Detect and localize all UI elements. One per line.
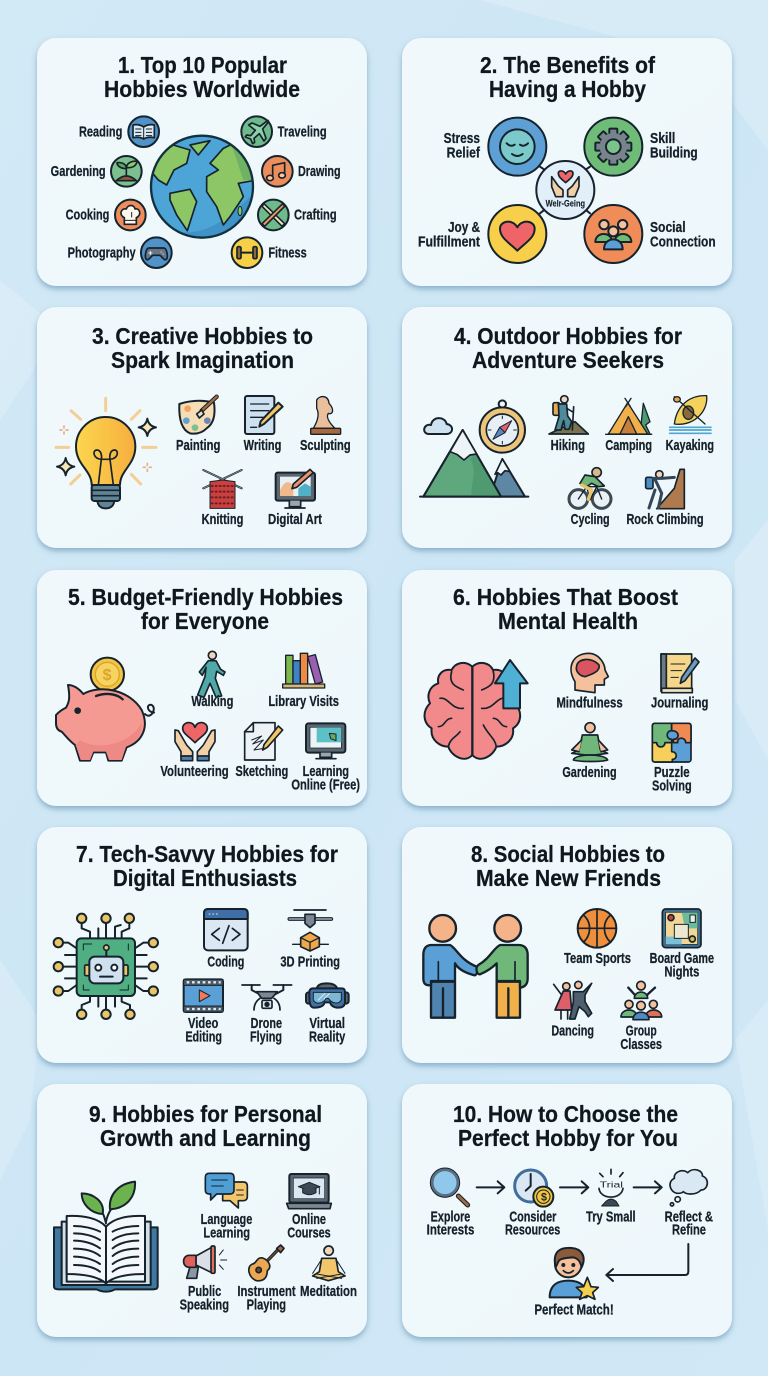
label: rock climbing: Rock Climbing (626, 512, 704, 528)
arrow: reflect to perfect match (606, 1244, 688, 1281)
icon: walking (198, 651, 225, 697)
heading: card 5 (68, 584, 343, 634)
icon: board game (662, 909, 701, 948)
text: explore interests (427, 1209, 474, 1238)
text: puzzle solving (652, 765, 692, 795)
label: coding: Coding (207, 955, 244, 971)
icon: writing (245, 396, 283, 434)
icon: magnifier (430, 1168, 468, 1205)
icon: knitting (203, 470, 242, 508)
label: gardening: Gardening (51, 164, 106, 180)
heading: card 3: Spark Imagination (111, 347, 294, 373)
label: try small: Try Small (586, 1209, 636, 1225)
label: library visits: Library Visits (268, 694, 339, 710)
arrow: try to reflect (634, 1181, 662, 1193)
heading: card 9 (89, 1101, 322, 1151)
text: learning online (291, 764, 360, 794)
label: camping: Camping (605, 438, 652, 454)
heading: card 1 (104, 52, 300, 102)
panel: 10 choose the perfect hobby (402, 1084, 732, 1337)
text: board game nights: Board Game (650, 951, 714, 967)
heading: card 5: 5. Budget-Friendly Hobbies (68, 584, 343, 610)
icon: language learning (205, 1173, 247, 1208)
text: consider resources (505, 1209, 560, 1238)
heading: card 6: 6. Hobbies That Boost (453, 584, 678, 610)
icon: two people shaking hands (423, 915, 528, 1018)
heading: card 2: Having a Hobby (489, 76, 646, 102)
arrow: consider to try (560, 1181, 588, 1193)
icon: journaling (661, 654, 699, 693)
icon: kayaking (670, 396, 711, 433)
text: puzzle solving: Solving (652, 779, 692, 795)
label: photography: Photography (68, 245, 136, 261)
icon: public speaking megaphone (184, 1246, 227, 1278)
label: knitting: Knitting (202, 512, 243, 528)
text: video editing: Editing (185, 1030, 222, 1046)
icon: sculpting bust (311, 397, 341, 434)
icon: photography controller (141, 237, 172, 268)
icon: guitar (249, 1245, 284, 1281)
label: sculpting: Sculpting (300, 438, 351, 454)
panel: 6 mental health hobbies (402, 570, 732, 806)
heading: card 4: 4. Outdoor Hobbies for (454, 323, 682, 349)
icon: perfect match person with star (550, 1248, 598, 1299)
text: virtual reality: Reality (309, 1030, 345, 1046)
heading: card 3: 3. Creative Hobbies to (92, 323, 313, 349)
label: dancing: Dancing (551, 1023, 594, 1039)
icon: cycling (569, 468, 611, 508)
icon: piggy bank (56, 658, 154, 761)
label: kayaking: Kayaking (666, 438, 714, 454)
text: board game nights (650, 951, 714, 981)
text: public speaking: Public (188, 1284, 221, 1300)
text: virtual reality (309, 1016, 345, 1046)
text: language learning: Learning (203, 1226, 250, 1242)
icon: brain with up arrow (425, 660, 528, 759)
heading: card 9: Growth and Learning (100, 1125, 311, 1151)
icon: 3d printing (289, 910, 331, 951)
label: crafting: Crafting (294, 208, 337, 224)
text: reflect and refine: Refine (672, 1222, 706, 1238)
icon: drawing music notes (262, 156, 293, 187)
text: stress relief (444, 131, 480, 161)
icon: clock and coin (515, 1170, 553, 1207)
icon: clock and coin: $ (541, 1192, 547, 1204)
heading: card 6: Mental Health (498, 608, 638, 634)
text: joy and fulfillment: Joy & (448, 220, 480, 236)
icon: gardening (111, 156, 142, 187)
icon: learning online (306, 723, 345, 759)
label: volunteering: Volunteering (160, 764, 229, 780)
heading: card 8: Make New Friends (476, 865, 661, 891)
icon: traveling plane (241, 116, 272, 147)
icon: gardening meditation figure (572, 723, 608, 761)
text: online courses: Online (292, 1212, 326, 1228)
text: drone flying: Flying (250, 1030, 282, 1046)
heading: card 1: 1. Top 10 Popular (118, 52, 287, 78)
text: learning online: Learning (303, 764, 349, 780)
text: online courses: Courses (287, 1226, 331, 1242)
icon: joy heart (488, 205, 546, 263)
icon: drone (242, 985, 292, 1010)
heading: card 7: 7. Tech-Savvy Hobbies for (76, 841, 338, 867)
text: group classes: Classes (620, 1037, 662, 1053)
text: stress relief: Stress (444, 131, 480, 147)
icon: basketball (578, 909, 616, 948)
label: gardening: Gardening (562, 765, 617, 781)
icon: camping tent (606, 398, 652, 434)
icon: sketching (245, 723, 283, 760)
icon: trial cup: Trial (600, 1179, 623, 1189)
label: sketching: Sketching (235, 764, 288, 780)
text: explore interests: Interests (427, 1222, 474, 1238)
heading: card 8: 8. Social Hobbies to (471, 841, 665, 867)
text: public speaking: Speaking (180, 1298, 229, 1314)
text: joy and fulfillment: Fulfillment (418, 234, 480, 250)
panel: 4 outdoor hobbies (402, 307, 732, 548)
label: digital art: Digital Art (268, 512, 322, 528)
icon: compass (480, 400, 525, 453)
heading: card 10: Perfect Hobby for You (458, 1125, 678, 1151)
label: cycling: Cycling (571, 512, 610, 528)
text: public speaking (180, 1284, 229, 1314)
label: walking: Walking (191, 694, 233, 710)
panel: 8 social hobbies (402, 827, 732, 1063)
text: instrument playing: Instrument (237, 1284, 296, 1300)
text: skill building (650, 131, 698, 161)
icon: online courses (287, 1174, 331, 1209)
icon: mindfulness head (571, 653, 608, 693)
text: stress relief: Relief (447, 145, 480, 161)
label: perfect match: Perfect Match! (534, 1303, 614, 1319)
text: consider resources: Resources (505, 1222, 560, 1238)
heading: card 6 (453, 584, 678, 634)
icon: cloud (424, 418, 452, 434)
text: puzzle solving: Puzzle (654, 765, 690, 781)
icon: digital art (276, 469, 315, 508)
heading: card 7 (76, 841, 338, 891)
panel: 5 budget-friendly hobbies (37, 570, 367, 806)
text: virtual reality: Virtual (309, 1016, 345, 1032)
heading: card 3 (92, 323, 313, 373)
icon: coding (204, 909, 248, 950)
icon: stress relief face (488, 118, 546, 176)
heading: card 9: 9. Hobbies for Personal (89, 1101, 322, 1127)
icon: fitness dumbbell (232, 237, 262, 268)
text: explore interests: Explore (431, 1209, 470, 1225)
label: fitness: Fitness (268, 245, 307, 261)
heading: card 1: Hobbies Worldwide (104, 76, 300, 102)
label: hiking: Hiking (551, 438, 585, 454)
text: social connection: Social (650, 220, 686, 236)
icon: meditation (313, 1246, 345, 1281)
icon: hiking (549, 396, 588, 434)
text: drone flying: Drone (251, 1016, 282, 1032)
text: drone flying (250, 1016, 282, 1046)
text: skill building: Building (650, 145, 698, 161)
text: group classes: Group (626, 1023, 657, 1039)
heading: card 10: 10. How to Choose the (453, 1101, 678, 1127)
label: journaling: Journaling (651, 696, 708, 712)
text: language learning (201, 1212, 252, 1242)
icon: skill gear (584, 118, 642, 176)
icon: cooking (115, 200, 146, 230)
heading: card 7: Digital Enthusiasts (113, 865, 297, 891)
text: joy and fulfillment (418, 220, 480, 250)
text: reflect and refine (665, 1209, 713, 1238)
text: group classes (620, 1023, 662, 1053)
icon: group classes (621, 981, 662, 1020)
icon: painting palette (179, 397, 217, 434)
label: drawing: Drawing (298, 164, 341, 180)
icon: robot chip (54, 914, 158, 1019)
arrow: explore to consider (477, 1181, 504, 1193)
icon: well-being center (536, 161, 594, 219)
icon: piggy bank: $ (103, 667, 112, 684)
text: social connection: Connection (650, 234, 716, 250)
panel: 1 top 10 popular hobbies (37, 38, 367, 286)
text: video editing (185, 1016, 222, 1046)
label: writing: Writing (244, 438, 281, 454)
icon: virtual reality (306, 983, 349, 1008)
icon: globe (150, 134, 254, 239)
label: traveling: Traveling (278, 124, 327, 140)
icon: volunteering hands (175, 723, 215, 761)
heading: card 5: for Everyone (141, 608, 269, 634)
heading: card 4 (454, 323, 682, 373)
icon: trial cup (599, 1169, 623, 1206)
icon: crafting (258, 200, 289, 230)
heading: card 10 (453, 1101, 678, 1151)
icon: video editing (184, 979, 223, 1012)
icon: open book with sprout (54, 1182, 158, 1292)
label: painting: Painting (176, 438, 220, 454)
text: video editing: Video (188, 1016, 219, 1032)
icon: library books (283, 653, 325, 688)
icon: social people (584, 205, 642, 263)
text: board game nights: Nights (664, 965, 699, 981)
icon: puzzle (652, 723, 691, 762)
text: online courses (287, 1212, 331, 1242)
label: 3d printing: 3D Printing (280, 955, 340, 971)
icon: light bulb (56, 398, 156, 508)
text: learning online: Online (Free) (291, 778, 360, 794)
panel: 9 personal growth (37, 1084, 367, 1337)
label: mindfulness: Mindfulness (556, 696, 623, 712)
heading: card 4: Adventure Seekers (472, 347, 664, 373)
label: cooking: Cooking (66, 208, 109, 224)
label: meditation: Meditation (300, 1284, 357, 1300)
icon: well-being center: Welr-Geing (546, 199, 585, 209)
text: language learning: Language (201, 1212, 252, 1228)
icon: thought cloud (670, 1170, 707, 1206)
text: instrument playing (237, 1284, 296, 1314)
icon: dancing (554, 981, 592, 1019)
text: instrument playing: Playing (247, 1298, 286, 1314)
heading: card 2 (480, 52, 655, 102)
icon: rock climbing (646, 469, 684, 509)
panel: 7 tech-savvy hobbies (37, 827, 367, 1063)
text: reflect and refine: Reflect & (665, 1209, 713, 1225)
icon: reading (128, 116, 159, 147)
text: social connection (650, 220, 716, 250)
heading: card 8 (471, 841, 665, 891)
label: team sports: Team Sports (564, 951, 631, 967)
icon: mountains (420, 430, 528, 497)
label: reading: Reading (79, 124, 122, 140)
text: skill building: Skill (650, 131, 675, 147)
heading: card 2: 2. The Benefits of (480, 52, 655, 78)
panel: 2 benefits of having a hobby (402, 38, 732, 286)
panel: 3 creative hobbies (37, 307, 367, 548)
text: consider resources: Consider (509, 1209, 557, 1225)
